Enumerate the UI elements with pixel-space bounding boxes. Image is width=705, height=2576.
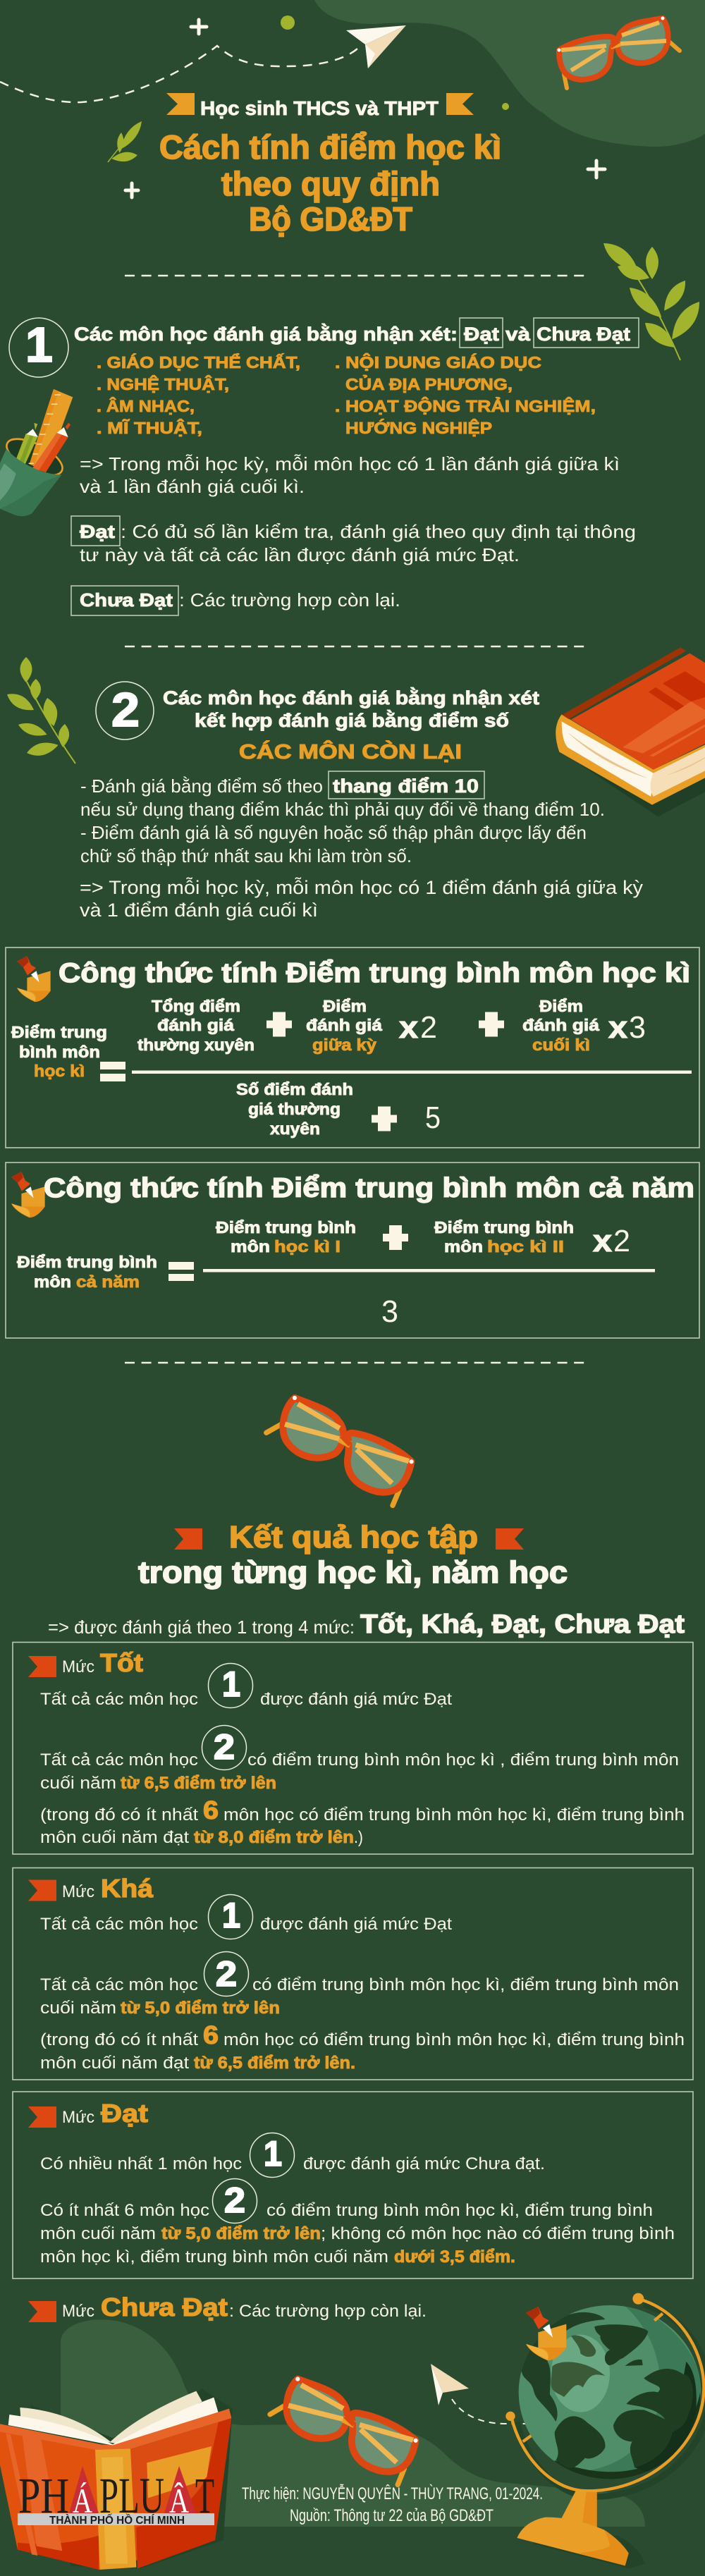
criterion 1: 1 (222, 1896, 240, 1935)
heading: learning results: Kết quả học tập (229, 1520, 478, 1554)
panel: full-year average formula (6, 1163, 699, 1338)
criterion 1: được đánh giá mức Chưa đạt. (303, 2154, 545, 2173)
logo: Pháp Luật: Â (169, 2481, 189, 2520)
level heading: Tốt (100, 1648, 143, 1677)
level Chưa Đạt (28, 2293, 427, 2322)
multiplier x2: x (399, 1010, 419, 1045)
section 1 number: 1 (25, 317, 53, 372)
section 2 body text: và 1 điểm đánh giá cuối kì (80, 900, 318, 921)
numerator term 1: học kì I (274, 1237, 341, 1256)
section 1 heading: Đạt (464, 324, 499, 345)
criterion 2 (40, 1951, 679, 2018)
criterion 2: từ 5,0 điểm trở lên (161, 2224, 321, 2243)
numerator term 3 (522, 997, 599, 1054)
section 2 body text (80, 771, 644, 921)
divider (125, 1362, 584, 1363)
left term: cả năm (76, 1272, 140, 1291)
section 2 number (96, 682, 154, 740)
icon: note with pin (17, 956, 51, 1002)
multiplier x3: x (608, 1010, 628, 1045)
criterion 2: Tất cả các môn học (40, 1750, 198, 1770)
criterion 2: cuối năm (40, 1774, 116, 1793)
subject list: . GIÁO DỤC THỂ CHẤT, (97, 352, 300, 372)
multiplier x2: 2 (613, 1224, 630, 1258)
criterion 2 (40, 2178, 675, 2267)
criterion 2: dưới 3,5 điểm. (394, 2247, 515, 2267)
panel: semester average formula (6, 947, 699, 1148)
criterion 2 (40, 1726, 679, 1793)
icon: glasses bottom (262, 2373, 425, 2487)
criterion 1 (40, 1664, 452, 1709)
panel title: Công thức tính Điểm trung bình môn học kì (59, 958, 690, 988)
denominator (236, 1080, 441, 1138)
subject list: . NGHỆ THUẬT, (97, 374, 229, 393)
plus sign (266, 1012, 292, 1036)
icon: leaf branch left (4, 657, 75, 763)
logo: Pháp Luật: Á (73, 2481, 92, 2520)
left term: Điểm trung (11, 1023, 107, 1041)
criterion note: môn cuối năm đạt (40, 2054, 189, 2073)
fraction line (132, 1070, 692, 1074)
definition: Chưa Đạt (71, 586, 400, 615)
criterion 2: có điểm trung bình môn học kì , điểm trung bình môn (247, 1750, 679, 1770)
criterion 2: từ 5,0 điểm trở lên (121, 1999, 280, 2018)
criterion note: 6 (203, 1796, 219, 1824)
plus sign (383, 1225, 408, 1250)
criterion 1: Tất cả các môn học (40, 1690, 198, 1709)
level heading (28, 1648, 143, 1677)
icon: glasses middle (257, 1392, 422, 1508)
equals sign (100, 1062, 125, 1081)
criterion 2: Tất cả các môn học (40, 1975, 198, 1994)
panel: level Đạt (13, 2092, 693, 2278)
numerator term 1: Điểm trung bình (216, 1218, 356, 1237)
numerator term 2: Điểm (323, 997, 367, 1015)
denominator: 5 (425, 1100, 441, 1135)
subject list: . NỘI DUNG GIÁO DỤC (335, 352, 541, 372)
criterion 2: từ 6,5 điểm trở lên (121, 1774, 276, 1793)
section 1 body text (80, 453, 620, 497)
logo: Pháp Luật (18, 2466, 214, 2527)
section 1 heading: Chưa Đạt (537, 324, 630, 345)
numerator term 2: môn (444, 1237, 483, 1256)
multiplier x3 (608, 1010, 646, 1045)
icon: closed book (556, 647, 705, 816)
subject list: . MĨ THUẬT, (97, 418, 202, 437)
criterion 1: được đánh giá mức Đạt (260, 1915, 452, 1934)
credits: Thực hiện: NGUYỄN QUYÊN - THÙY TRANG, 01-2024. (242, 2483, 543, 2503)
section 2 heading: kết hợp đánh giá bằng điểm số (195, 709, 509, 731)
logo: Pháp Luật: THÀNH PHỐ HỒ CHÍ MINH (49, 2513, 185, 2527)
title: Cách tính điểm học kì (159, 128, 501, 166)
subject list: HƯỚNG NGHIỆP (345, 418, 492, 437)
section 2 body text: => Trong mỗi học kỳ, mỗi môn học có 1 điểm đánh giá giữa kỳ (80, 876, 644, 898)
criterion 1: Tất cả các môn học (40, 1915, 198, 1934)
multiplier x3: 3 (629, 1010, 646, 1045)
criterion 1 (40, 2133, 545, 2177)
level heading: Mức (62, 1657, 94, 1676)
icon: paper plane (346, 25, 406, 68)
section 1 number (9, 317, 68, 377)
multiplier x2 (593, 1224, 630, 1258)
logo: Pháp Luật: T (195, 2467, 214, 2524)
multiplier x2 (399, 1010, 437, 1045)
heading: learning results (138, 1520, 568, 1590)
subtitle ribbon: Học sinh THCS và THPT (200, 97, 439, 119)
section 2 heading (163, 687, 539, 763)
numerator term 2: Điểm trung bình (434, 1218, 574, 1237)
subject list (97, 352, 596, 437)
level heading: Mức (62, 2108, 94, 2127)
denominator: xuyên (270, 1120, 320, 1138)
criterion 2: môn học kì, điểm trung bình môn cuối năm (40, 2247, 388, 2267)
denominator: 3 (381, 1294, 398, 1329)
criterion note: từ 8,0 điểm trở lên (194, 1828, 354, 1847)
definition: Chưa Đạt: : Các trường hợp còn lại. (179, 589, 400, 611)
numerator term 3: cuối kì (532, 1036, 590, 1054)
criterion 2: 2 (224, 2181, 245, 2220)
left term: Điểm trung bình (17, 1253, 157, 1271)
level Chưa Đạt: : Các trường hợp còn lại. (229, 2302, 427, 2321)
criterion note: .) (354, 1828, 363, 1847)
icon: pencil cup (0, 389, 73, 516)
section 2 body text: chữ số thập thứ nhất sau khi làm tròn số. (80, 845, 412, 866)
heading: learning results: trong từng học kì, năm học (138, 1555, 568, 1590)
definition: Đạt: : Có đủ số lần kiểm tra, đánh giá theo quy định tại thông (121, 521, 636, 542)
icon: glasses top right (557, 17, 680, 88)
subject list: . ÂM NHẠC, (97, 396, 195, 415)
section 2 body text: - Đánh giá bằng điểm số theo (80, 775, 323, 797)
numerator term 1 (137, 997, 255, 1054)
criterion 2: có điểm trung bình môn học kì, điểm trung bình (266, 2201, 653, 2220)
criterion note: môn cuối năm đạt (40, 1828, 189, 1847)
panel title: Công thức tính Điểm trung bình môn cả năm (44, 1173, 694, 1203)
divider (125, 275, 584, 276)
multiplier x2: 2 (420, 1010, 437, 1045)
title: theo quy định (221, 165, 440, 202)
panel: level Tốt (13, 1643, 693, 1854)
criterion 1: 1 (264, 2134, 282, 2173)
level heading: Mức (62, 1882, 94, 1901)
criterion 2: Có ít nhất 6 môn học (40, 2201, 209, 2220)
intro to four levels (48, 1609, 685, 1638)
criterion 1: được đánh giá mức Đạt (260, 1690, 452, 1709)
divider (125, 646, 584, 647)
numerator term 2 (434, 1218, 574, 1256)
level heading: Khá (101, 1874, 154, 1903)
criterion 2: 2 (216, 1954, 237, 1994)
definition: Đạt (71, 516, 636, 565)
criterion note: (trong đó có ít nhất (40, 2030, 198, 2049)
logo: Pháp Luật: PH (18, 2467, 69, 2524)
icon: note with pin (11, 1172, 45, 1218)
level heading (28, 1874, 154, 1903)
criterion note: 6 (203, 2020, 219, 2049)
icon: globe (505, 2293, 705, 2568)
numerator term 3: đánh giá (522, 1016, 599, 1034)
section 2 body text: thang điểm 10 (333, 775, 479, 797)
decorative plus signs and dots (125, 16, 605, 197)
subject list: . HOẠT ĐỘNG TRẢI NGHIỆM, (335, 395, 596, 415)
left term (11, 1023, 107, 1080)
fraction line (203, 1269, 655, 1272)
numerator term 3: Điểm (539, 997, 583, 1015)
numerator term 1 (216, 1218, 356, 1256)
numerator term 1: Tổng điểm (152, 997, 240, 1015)
multiplier x2: x (593, 1224, 613, 1258)
criterion 2: môn cuối năm (40, 2224, 156, 2243)
icon: leaf branch right (599, 238, 705, 360)
definition: Đạt: Đạt (80, 521, 115, 542)
level Chưa Đạt: Chưa Đạt (101, 2293, 228, 2322)
section 1 heading: và (505, 324, 531, 345)
section 1 body text: => Trong mỗi học kỳ, mỗi môn học có 1 lần đánh giá giữa kì (80, 453, 620, 474)
criterion 1: Có nhiều nhất 1 môn học (40, 2154, 242, 2173)
left term: môn (34, 1272, 71, 1291)
numerator term 2: học kì II (487, 1237, 564, 1256)
numerator term 1: đánh giá (157, 1016, 234, 1034)
subtitle ribbon (166, 93, 474, 119)
criterion note (40, 1796, 685, 1847)
denominator: giá thường (248, 1100, 341, 1118)
criterion note: từ 6,5 điểm trở lên. (194, 2054, 355, 2073)
equals sign (168, 1262, 194, 1281)
definition: Chưa Đạt: Chưa Đạt (80, 589, 173, 611)
criterion 2: 2 (214, 1727, 235, 1767)
criterion 1: 1 (222, 1664, 240, 1704)
logo: Pháp Luật: PLU (99, 2467, 164, 2524)
background blob: bottom hill (61, 2319, 645, 2527)
credits: Nguồn: Thông tư 22 của Bộ GD&ĐT (290, 2506, 494, 2525)
section 2 body text: nếu sử dụng thang điểm khác thì phải quy đổi về thang điểm 10. (80, 799, 605, 820)
plus sign (479, 1012, 504, 1036)
title: Bộ GD&ĐT (249, 200, 412, 238)
section 2 number: 2 (111, 683, 140, 737)
left term: học kì (34, 1062, 85, 1080)
left term (17, 1253, 157, 1291)
icon: open book (0, 2388, 233, 2570)
criterion note: (trong đó có ít nhất (40, 1805, 198, 1824)
title (159, 128, 501, 238)
dashed flight path (0, 44, 362, 102)
intro to four levels: Tốt, Khá, Đạt, Chưa Đạt (360, 1609, 685, 1638)
numerator term 2 (306, 997, 382, 1054)
criterion 2: có điểm trung bình môn học kì, điểm trung bình môn (252, 1975, 679, 1994)
background blob: top right (314, 0, 705, 147)
numerator term 2: giữa kỳ (312, 1036, 376, 1054)
credits (242, 2483, 543, 2525)
numerator term 2: đánh giá (306, 1016, 382, 1034)
subject list: CỦA ĐỊA PHƯƠNG, (345, 374, 513, 393)
definition: Đạt: tư này và tất cả các lần được đánh giá mức Đạt. (80, 544, 520, 565)
criterion 2: cuối năm (40, 1999, 116, 2018)
panel: level Khá (13, 1868, 693, 2080)
numerator term 1: thường xuyên (137, 1036, 255, 1054)
icon: small leaf (108, 118, 145, 164)
level Chưa Đạt: Mức (62, 2302, 94, 2321)
denominator: Số điểm đánh (236, 1080, 353, 1098)
section 2 heading: CÁC MÔN CÒN LẠI (239, 740, 462, 763)
section 1 heading: Các môn học đánh giá bằng nhận xét: (74, 323, 458, 345)
level heading: Đạt (101, 2099, 148, 2128)
criterion note (40, 2020, 685, 2073)
level heading (28, 2099, 148, 2128)
icon: paper plane bottom (431, 2364, 526, 2424)
criterion 1 (40, 1895, 452, 1939)
numerator term 1: môn (231, 1237, 270, 1256)
section 1 body text: và 1 lần đánh giá cuối kì. (80, 476, 305, 497)
criterion note: môn học có điểm trung bình môn học kì, điểm trung bình (223, 2030, 685, 2049)
section 1 heading (74, 318, 639, 348)
criterion 2: ; không có môn học nào có điểm trung bình (321, 2224, 675, 2243)
left term: bình môn (19, 1043, 100, 1061)
section 2 body text: - Điểm đánh giá là số nguyên hoặc số thập phân được lấy đến (80, 822, 587, 843)
intro to four levels: => được đánh giá theo 1 trong 4 mức: (48, 1617, 355, 1638)
section 2 heading: Các môn học đánh giá bằng nhận xét (163, 687, 539, 709)
criterion note: môn học có điểm trung bình môn học kì, điểm trung bình (223, 1805, 685, 1824)
